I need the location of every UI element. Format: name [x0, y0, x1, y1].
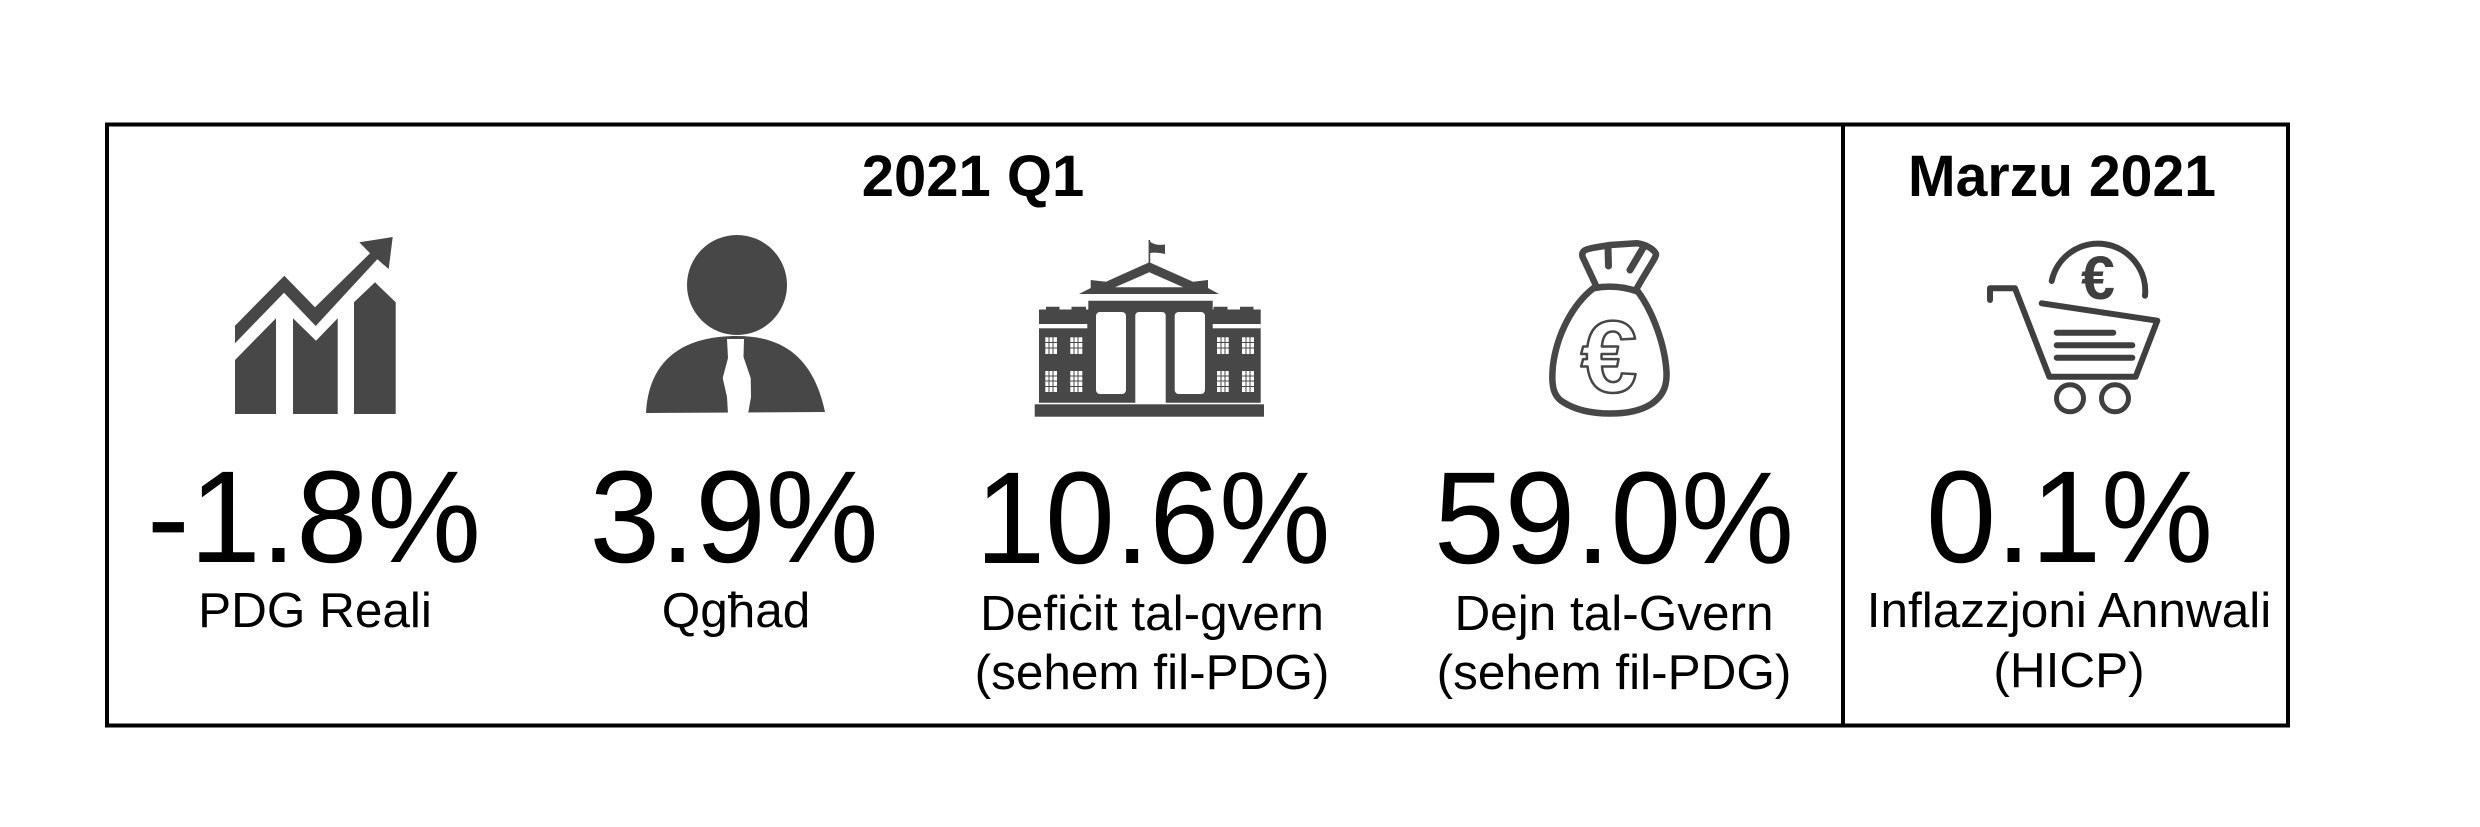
metric: government debt: Dejn tal-Gvern: [1454, 586, 1774, 641]
metric: government deficit: 10.6%: [976, 444, 1330, 591]
metric: government debt: [1434, 444, 1794, 700]
metric: real GDP: PDG Reali: [198, 583, 432, 638]
icon: money bag with euro: [1552, 243, 1667, 414]
icon: rising chart: [235, 237, 396, 414]
heading: Marzu 2021: Marzu 2021: [1908, 144, 2216, 209]
metric: government deficit: (sehem fil-PDG): [975, 645, 1329, 700]
icon: government building: [1035, 240, 1264, 417]
metric: real GDP: -1.8%: [147, 443, 481, 590]
icon: shopping cart with euro coin: €: [2081, 244, 2115, 312]
metric: annual inflation: 0.1%: [1926, 443, 2213, 590]
metric: unemployment: Qgħad: [662, 583, 810, 638]
euro sign: €: [1581, 300, 1637, 414]
metric: annual inflation: Inflazzjoni Annwali: [1867, 583, 2271, 638]
metric: government debt: (sehem fil-PDG): [1437, 645, 1791, 700]
icon: person with tie: [646, 235, 825, 414]
metric: unemployment: 3.9%: [590, 443, 878, 590]
metric: annual inflation: [1867, 443, 2271, 698]
heading: 2021 Q1: 2021 Q1: [862, 144, 1084, 209]
metric: government deficit: Defiċit tal-gvern: [980, 586, 1324, 641]
panel: frame with two sections: [107, 124, 2288, 726]
metric: government debt: 59.0%: [1434, 444, 1794, 591]
metric: government deficit: [975, 444, 1330, 700]
icon: shopping cart with euro coin: [1990, 244, 2157, 412]
metric: annual inflation: (HICP): [1993, 643, 2145, 698]
